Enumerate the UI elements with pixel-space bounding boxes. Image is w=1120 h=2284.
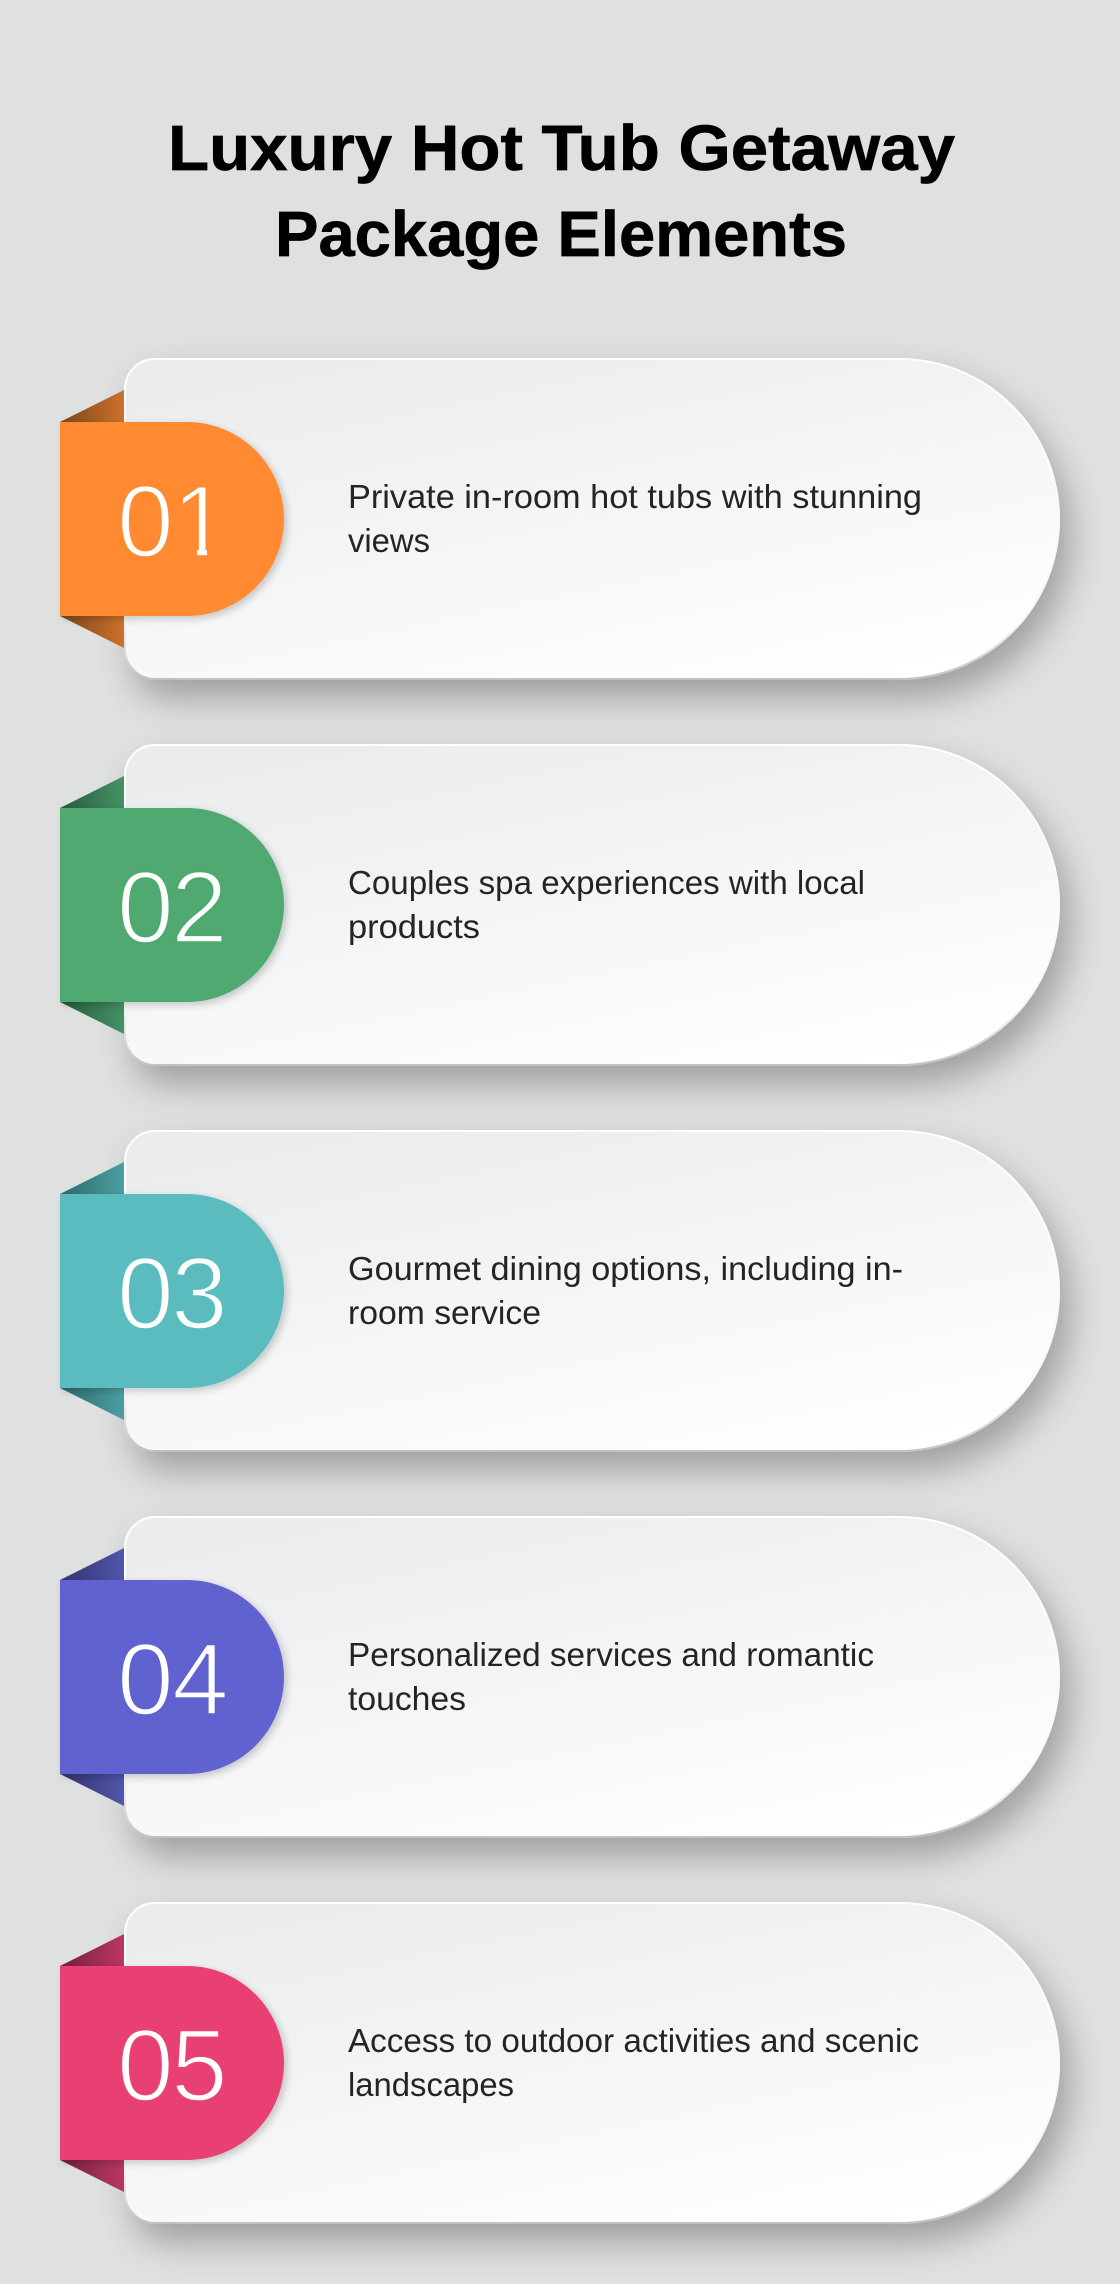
panel: item 03	[60, 1131, 1059, 1451]
panel: item 04	[60, 1517, 1059, 1837]
text 04: Personalized services and romantic	[348, 1636, 874, 1673]
title	[168, 112, 955, 270]
text 05: landscapes	[348, 2066, 514, 2103]
text 05	[348, 2022, 919, 2103]
title: Luxury Hot Tub Getaway	[168, 112, 955, 184]
number 05: 05	[117, 2008, 228, 2122]
card 05	[125, 1903, 1059, 2223]
text 02: Couples spa experiences with local	[348, 864, 865, 901]
number 02: 02	[117, 850, 228, 964]
text 03: room service	[348, 1294, 541, 1331]
panel: item 05	[60, 1903, 1059, 2223]
panel: item 01	[60, 359, 1059, 679]
card 04	[125, 1517, 1059, 1837]
card 01	[125, 359, 1059, 679]
text 04: touches	[348, 1680, 466, 1717]
number tab 01	[60, 422, 284, 616]
number 03: 03	[117, 1236, 228, 1350]
number 04: 04	[117, 1622, 229, 1736]
number 01: 01	[117, 464, 229, 578]
ribbon folds 01	[60, 390, 124, 648]
title: Package Elements	[275, 198, 847, 270]
ribbon folds 03	[60, 1162, 124, 1420]
text 03	[348, 1250, 903, 1331]
panel: item 02	[60, 745, 1059, 1065]
text 03: Gourmet dining options, including in-	[348, 1250, 903, 1287]
text 01: Private in-room hot tubs with stunning	[348, 478, 922, 515]
text 01	[348, 478, 922, 559]
ribbon folds 02	[60, 776, 124, 1034]
text 05: Access to outdoor activities and scenic	[348, 2022, 919, 2059]
number tab 02	[60, 808, 284, 1002]
text 02: products	[348, 908, 480, 945]
text 02	[348, 864, 865, 945]
number tab 05	[60, 1966, 284, 2160]
text 04	[348, 1636, 874, 1717]
card 03	[125, 1131, 1059, 1451]
ribbon folds 04	[60, 1548, 124, 1806]
number tab 04	[60, 1580, 284, 1774]
ribbon folds 05	[60, 1934, 124, 2192]
text 01: views	[348, 522, 430, 559]
number tab 03	[60, 1194, 284, 1388]
card 02	[125, 745, 1059, 1065]
